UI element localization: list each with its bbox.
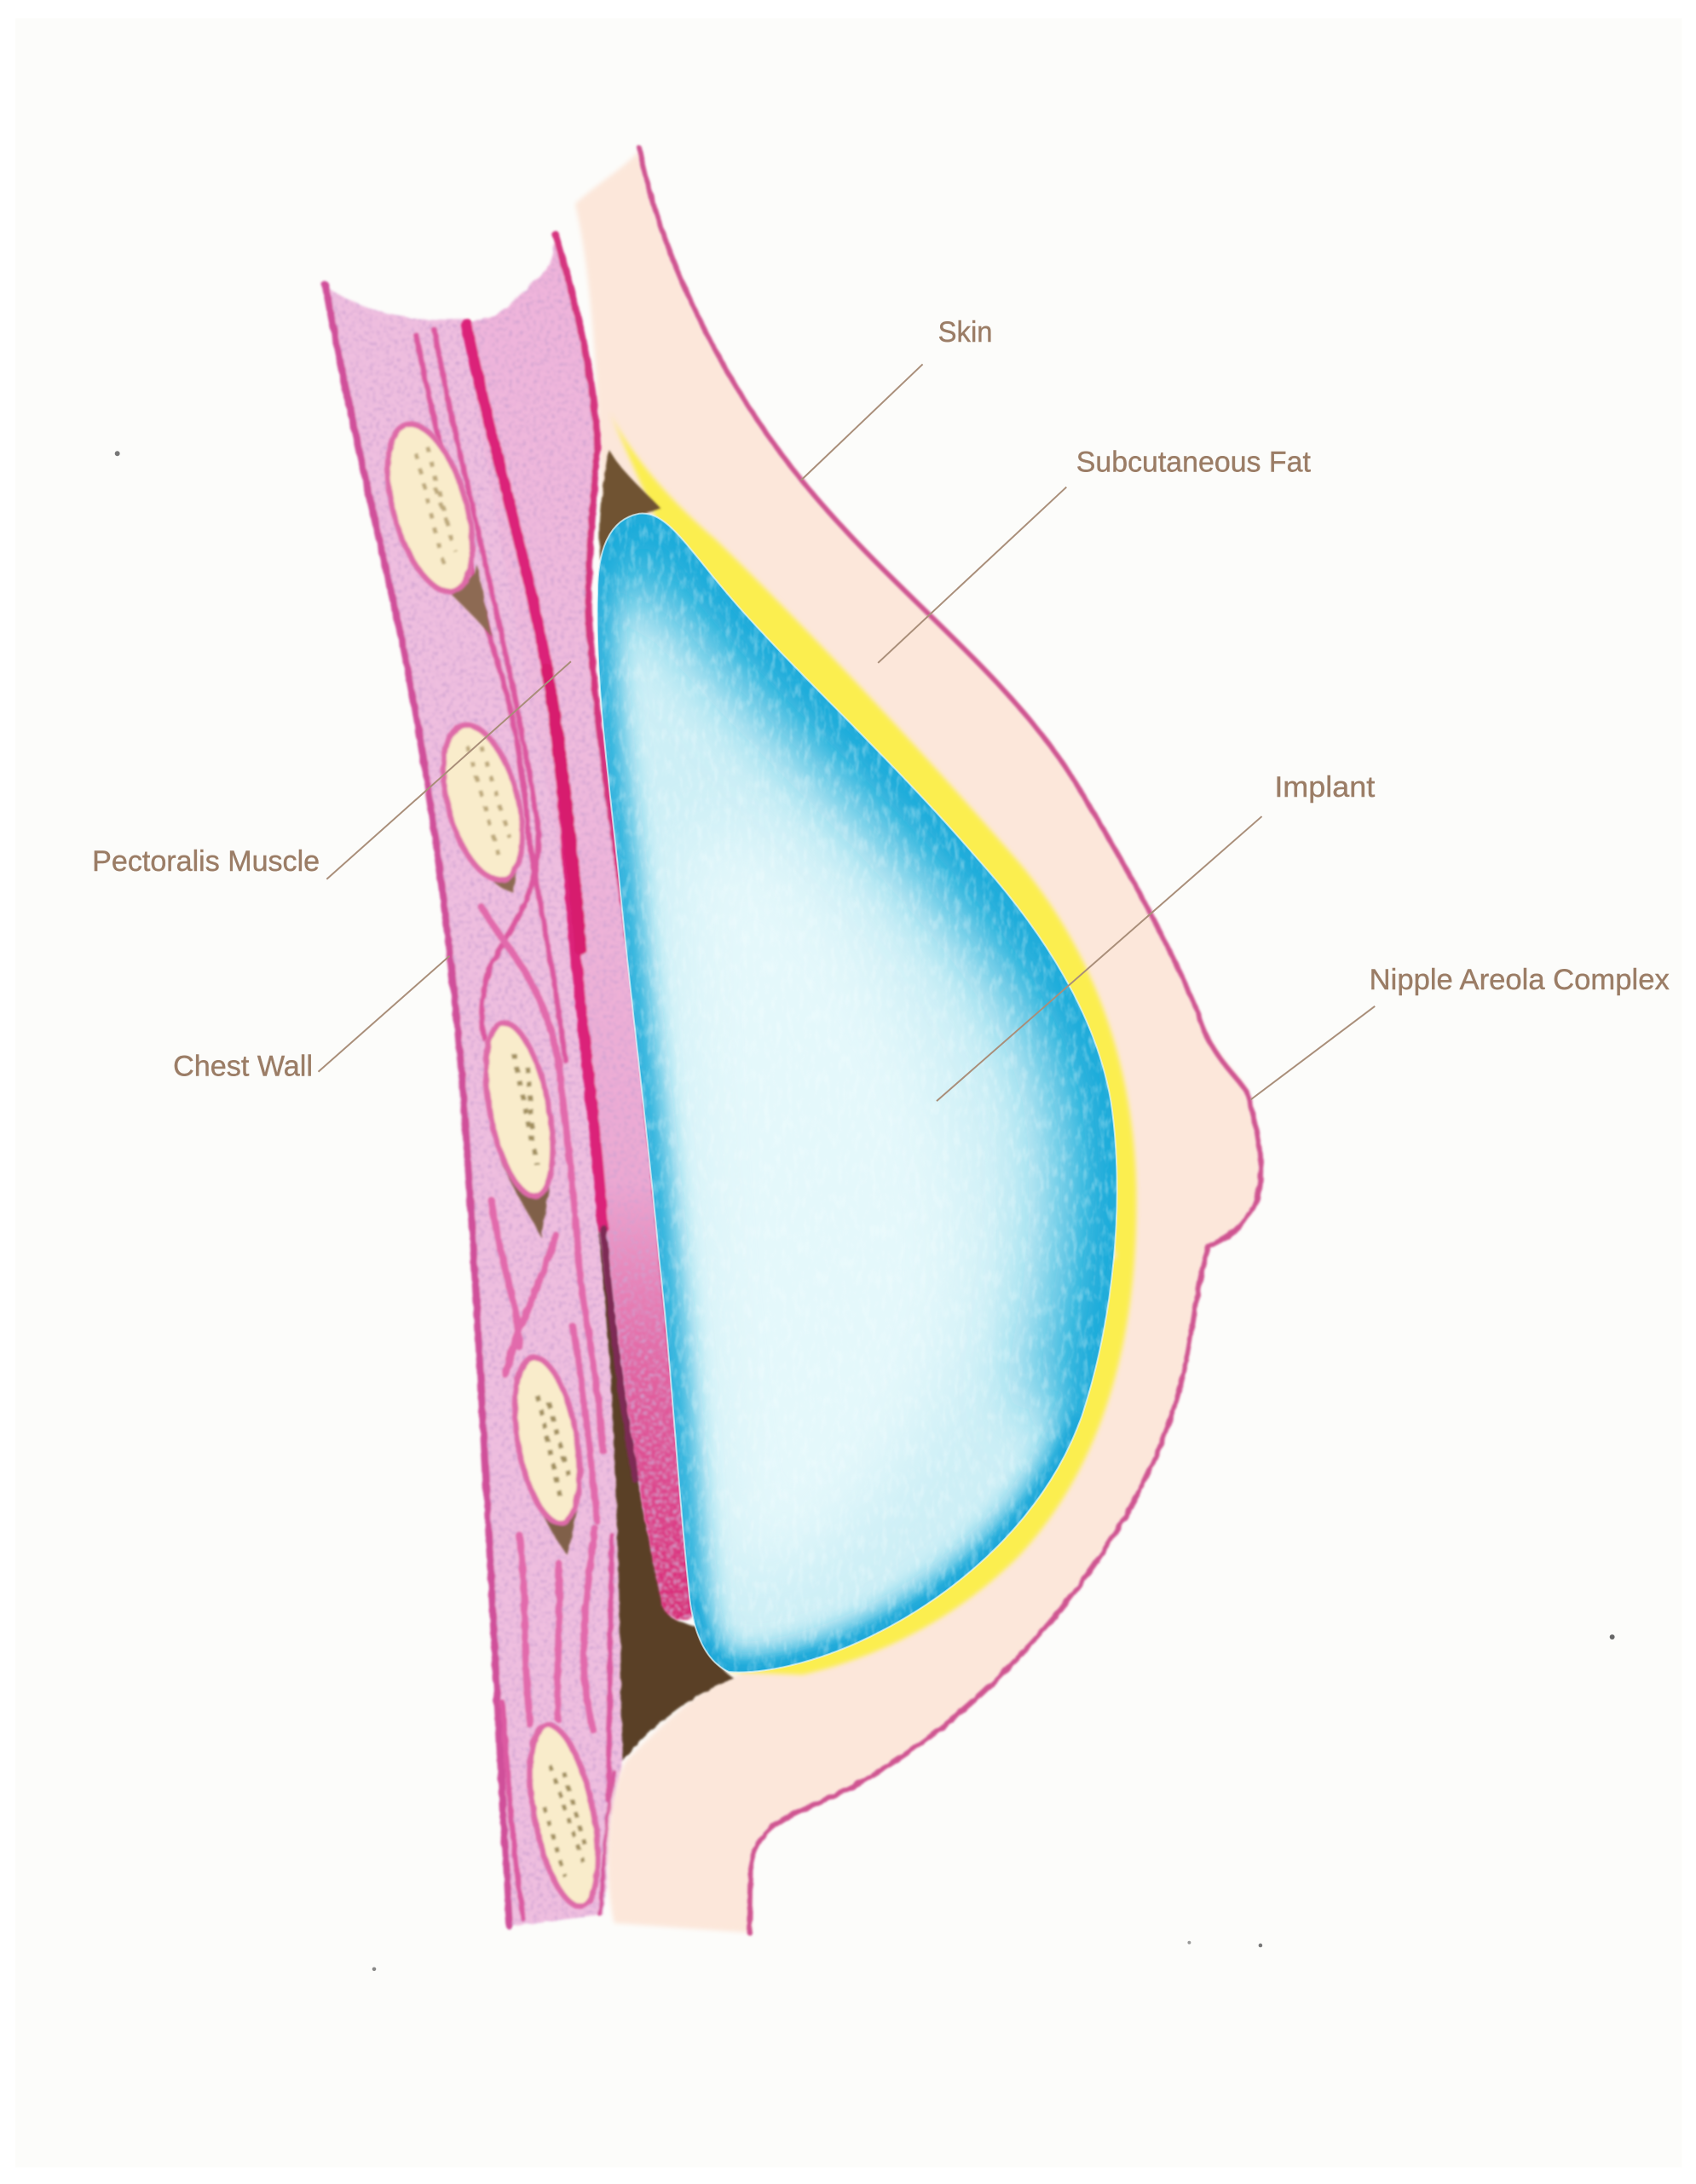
rib 4	[504, 1352, 591, 1554]
labelled anatomical illustration	[94, 143, 1670, 1972]
label: Implant: Implant	[1274, 771, 1376, 804]
rib 1	[372, 415, 492, 637]
ribs	[372, 415, 610, 1911]
rib 2	[429, 717, 537, 893]
brown tissue upper	[599, 449, 661, 561]
pectoralis muscle	[464, 234, 698, 1621]
pectoralis muscle lines	[466, 234, 691, 1608]
rib 3	[474, 1017, 565, 1238]
label: Chest Wall: Chest Wall	[173, 1051, 313, 1083]
implant	[586, 503, 1131, 1689]
rib 5	[517, 1720, 610, 1911]
label: Pectoralis Muscle: Pectoralis Muscle	[92, 845, 320, 878]
label: Subcutaneous Fat: Subcutaneous Fat	[1076, 447, 1311, 479]
leader lines	[318, 364, 1375, 1101]
chest wall outline and fibres	[326, 285, 614, 1926]
yellow fat layer	[610, 413, 1136, 1674]
chest wall	[326, 285, 670, 1926]
subcutaneous fat	[575, 151, 1260, 1933]
skin outline	[639, 148, 1260, 1933]
label: Skin: Skin	[938, 316, 993, 349]
brown tissue lower	[597, 1214, 735, 1761]
label: Nipple Areola Complex: Nipple Areola Complex	[1370, 964, 1670, 996]
